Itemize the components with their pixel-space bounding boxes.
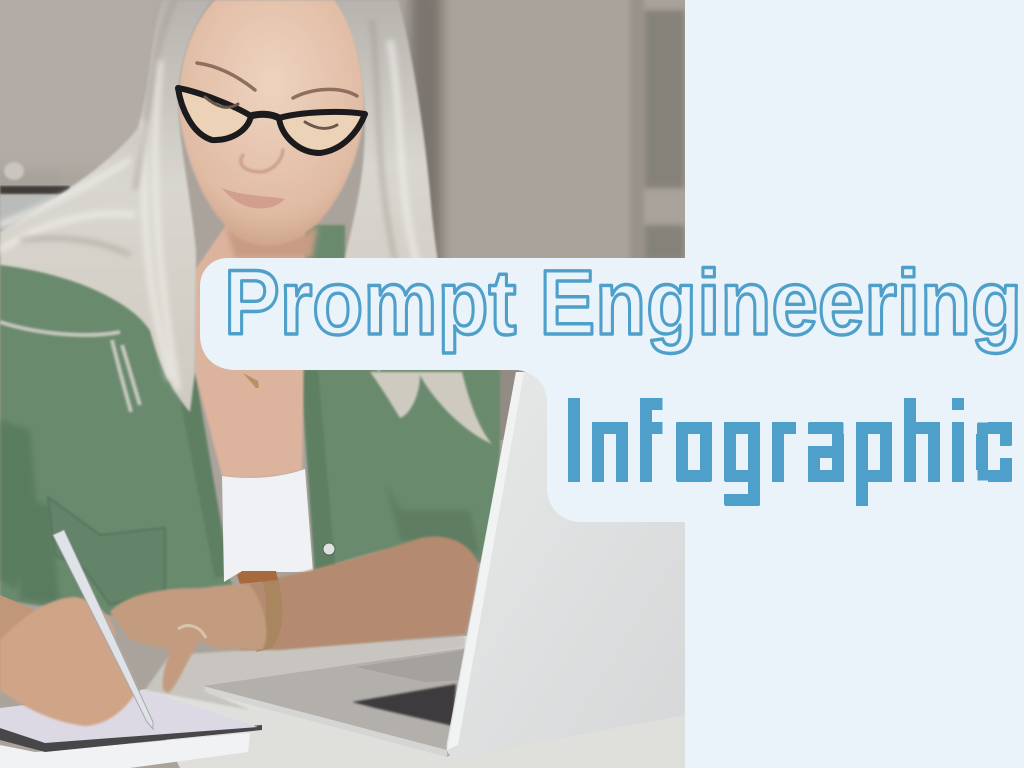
photo backdrop <box>0 0 685 768</box>
glasses bridge <box>251 114 279 118</box>
laptop base <box>203 648 468 757</box>
eyebrows, eyes, nose and lips <box>197 63 357 209</box>
desk behind laptop <box>145 636 465 710</box>
pen <box>53 530 153 729</box>
face <box>179 0 364 245</box>
notebook cover <box>0 725 262 752</box>
glasses <box>178 88 365 153</box>
writing hand <box>0 597 138 726</box>
notebook page <box>0 690 258 743</box>
neck and chest <box>195 205 305 478</box>
heading: Infographic: Infographic <box>564 379 1013 507</box>
right lens <box>279 112 365 153</box>
shirt <box>0 225 500 615</box>
shirt pocket <box>48 497 165 605</box>
right hair lock <box>335 0 445 372</box>
laptop base front edge <box>203 686 447 757</box>
resting hand <box>110 584 266 692</box>
hair highlights <box>0 40 430 390</box>
table <box>140 636 685 768</box>
left lens <box>178 88 251 140</box>
forearm <box>240 537 478 650</box>
ring <box>178 626 206 638</box>
trackpad <box>355 650 465 682</box>
left hair lock and sweep <box>0 0 212 412</box>
neck shadow <box>225 225 318 258</box>
photo: woman writing at a laptop <box>0 0 685 768</box>
white top <box>222 469 313 582</box>
laptop keys <box>352 684 456 726</box>
watch band <box>256 578 282 652</box>
lid highlight <box>447 372 524 750</box>
title band <box>200 258 1024 370</box>
left stray strands <box>0 322 140 412</box>
necklace <box>243 373 259 388</box>
laptop lid <box>446 372 685 757</box>
right background panel <box>685 0 1024 768</box>
right lower hair tail <box>370 372 492 444</box>
notebook pages <box>0 733 250 768</box>
subtitle band <box>517 370 685 522</box>
hair shadows <box>20 0 395 260</box>
shirt button <box>323 543 335 555</box>
hair <box>0 0 492 444</box>
watch head <box>237 571 278 584</box>
left forearm <box>0 595 40 690</box>
